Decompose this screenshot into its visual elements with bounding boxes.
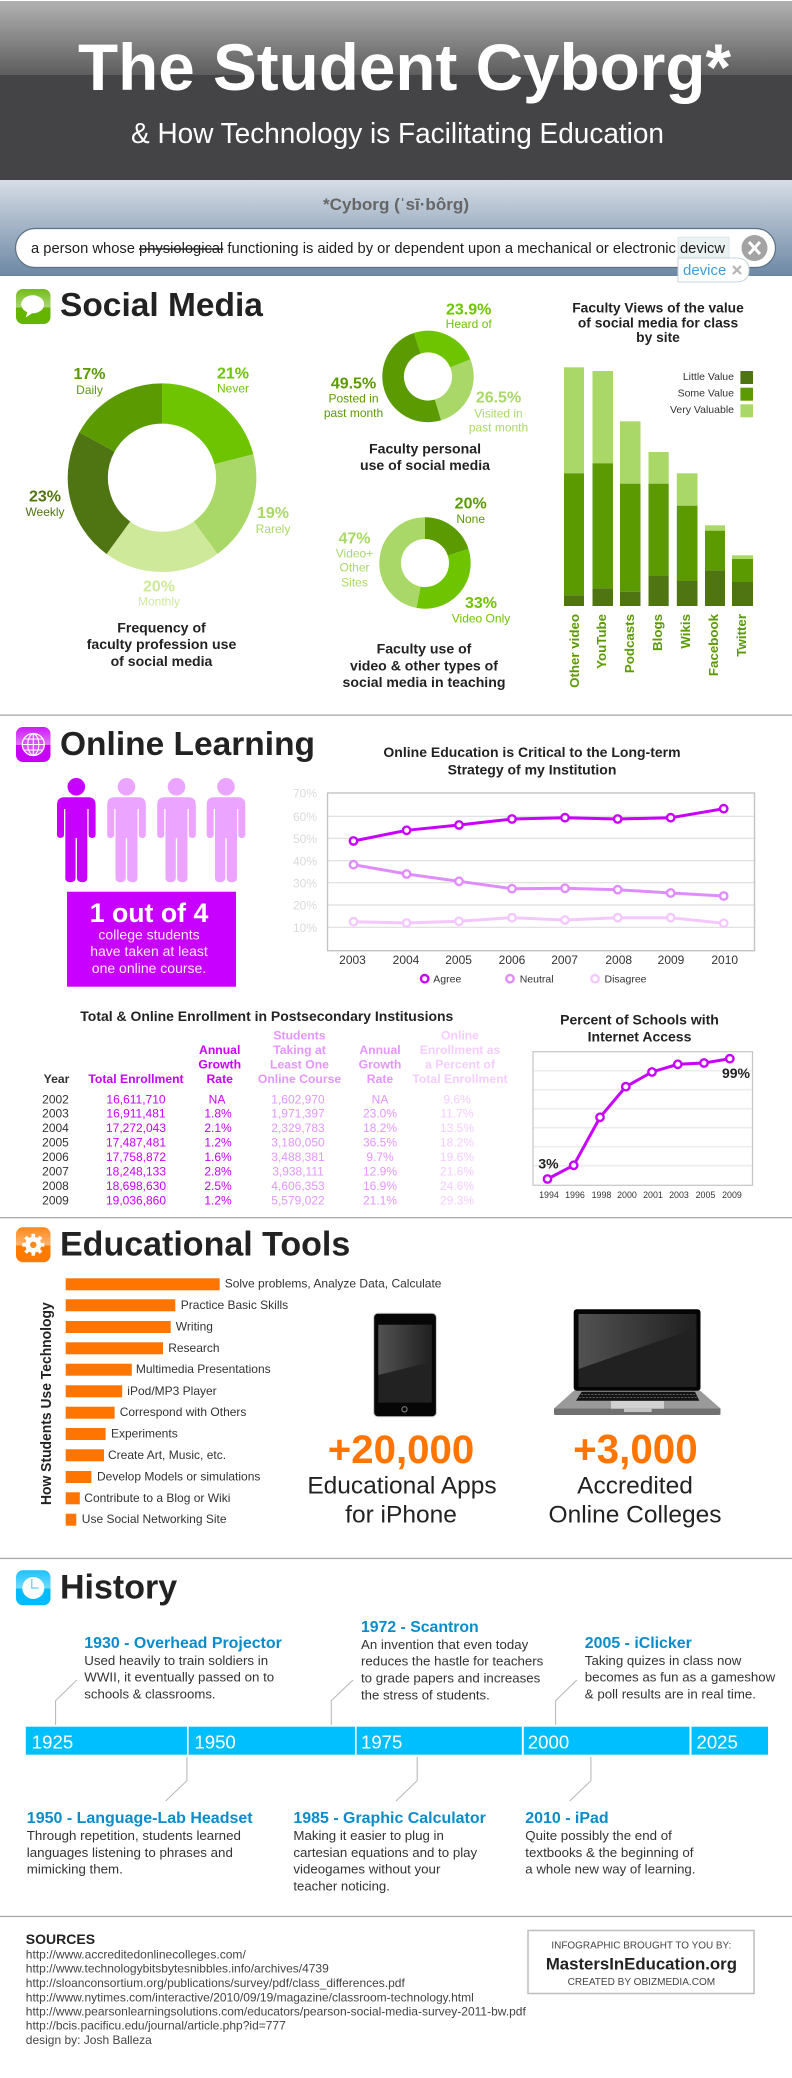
event: 1950 headset xyxy=(27,1810,253,1877)
series: neutral xyxy=(350,861,727,900)
column: online percent: 13.5% xyxy=(440,1121,474,1135)
section heading: Educational Tools: Educational Tools xyxy=(60,1226,350,1264)
donut chart: video use in teaching xyxy=(336,496,510,626)
donut chart: video use in teaching: 47% xyxy=(338,530,371,547)
legend: Neutral xyxy=(520,974,554,986)
column: online growth rate: 18.2% xyxy=(363,1121,397,1135)
donut chart: personal use: Visited in xyxy=(474,406,523,420)
column: online growth rate: NA xyxy=(372,1092,388,1106)
legend xyxy=(670,371,753,417)
donut chart: video use in teaching: Sites xyxy=(341,575,368,589)
line chart: schools with internet: 2009 xyxy=(722,1190,742,1200)
column: total enrollment: 19,036,860 xyxy=(106,1193,166,1207)
column: students online: 2,329,783 xyxy=(271,1121,325,1135)
bar chart: how students use technology: Contribute to a Blog or Wiki xyxy=(84,1491,230,1505)
column: total enrollment: 17,758,872 xyxy=(106,1150,166,1164)
line chart: online education critical: 2004 xyxy=(393,953,420,967)
stat: +3,000 colleges: +3,000 xyxy=(573,1426,698,1472)
donut chart: frequency of use: 19% xyxy=(257,505,289,522)
people pictogram: 1 of 4 xyxy=(57,778,245,882)
chart title: Internet Access xyxy=(588,1029,692,1045)
column: annual growth rate: 2.1% xyxy=(204,1121,232,1135)
definition heading: *Cyborg (ˈsī·bôrg) xyxy=(323,196,469,214)
donut chart: frequency of use: Rarely xyxy=(256,522,290,536)
column: online growth rate: 16.9% xyxy=(363,1179,397,1193)
icon: speech bubble xyxy=(16,289,50,324)
series: disagree xyxy=(350,914,727,927)
caption: video use: social media in teaching xyxy=(343,674,505,690)
event: 1930 overhead projector: schools & classrooms. xyxy=(84,1687,216,1702)
column: total enrollment: 17,487,481 xyxy=(106,1136,166,1150)
column: online percent: Online xyxy=(441,1029,479,1043)
line chart: online education critical: 30% xyxy=(293,876,317,890)
column: online growth rate: 23.0% xyxy=(363,1107,397,1121)
donut chart: personal use xyxy=(324,301,528,435)
stat: +3,000 colleges xyxy=(549,1426,721,1529)
bar labels: Blogs xyxy=(650,614,665,651)
event: 1930 overhead projector: WWII, it eventually passed on to xyxy=(84,1670,274,1685)
event: 1930 overhead projector: Used heavily to train soldiers in xyxy=(84,1653,268,1668)
column: students online: Taking at xyxy=(273,1043,326,1057)
donut chart: video use in teaching: Video Only xyxy=(452,612,510,626)
event: 1985 calculator: videogames without your xyxy=(293,1862,441,1877)
series: agree xyxy=(350,805,727,845)
bar labels: Wikis xyxy=(678,614,693,649)
timeline: 1950 xyxy=(194,1731,236,1752)
column: annual growth rate: Rate xyxy=(206,1072,233,1086)
credit box: MastersInEducation.org xyxy=(546,1954,737,1973)
donut chart: video use in teaching: 20% xyxy=(455,496,487,513)
event: 1930 overhead projector xyxy=(84,1635,282,1702)
column: total enrollment: Total Enrollment xyxy=(88,1072,184,1086)
donut chart: personal use: past month xyxy=(469,421,528,435)
event: 1985 calculator: Making it easier to plug in xyxy=(293,1828,444,1843)
bar chart: how students use technology: Practice Basic Skills xyxy=(181,1298,288,1312)
autocorrect tooltip: device xyxy=(683,262,726,279)
column: online growth rate: Growth xyxy=(359,1057,401,1071)
caption: video use: video & other types of xyxy=(350,657,498,673)
donut chart: personal use: past month xyxy=(324,406,383,420)
line chart: schools with internet: 2001 xyxy=(643,1190,663,1200)
donut chart: frequency of use: 23% xyxy=(29,488,61,506)
chart title: of social media for class xyxy=(578,315,738,330)
column: students online: Online Course xyxy=(258,1072,341,1086)
timeline xyxy=(26,1727,768,1755)
line chart: schools with internet: 1996 xyxy=(565,1190,585,1200)
event: 2005 iclicker: & poll results are in real time. xyxy=(585,1687,756,1702)
callout: 1 out of 4: have taken at least xyxy=(90,943,208,959)
event: 1972 scantron: 1972 - Scantron xyxy=(361,1619,479,1636)
bar chart: how students use technology: Experiments xyxy=(111,1426,178,1440)
donut chart: frequency of use: Daily xyxy=(76,383,103,397)
event: 2010 ipad xyxy=(525,1810,696,1877)
bar labels: Podcasts xyxy=(622,614,637,673)
donut chart: frequency of use: Weekly xyxy=(25,505,65,519)
line chart: schools with internet: 99% xyxy=(722,1065,751,1081)
sources: http://www.accreditedonlinecolleges.com/ xyxy=(26,1948,247,1961)
donut chart: frequency of use: 20% xyxy=(143,578,175,596)
chart title: Strategy of my Institution xyxy=(448,761,616,777)
column: students online: 3,938,111 xyxy=(272,1165,324,1179)
search bar: a person whose physiological functioning is aided by or dependent upon a mechanical or electronic devicw xyxy=(31,241,726,257)
event: 1985 calculator xyxy=(293,1810,486,1894)
bar chart: how students use technology: Research xyxy=(168,1341,220,1355)
bar labels xyxy=(567,613,749,688)
line chart: schools with internet: 1994 xyxy=(539,1190,559,1200)
donut chart: frequency of use: 21% xyxy=(217,366,249,382)
column: online percent: Enrollment as xyxy=(420,1043,501,1057)
donut chart: video use in teaching: Video+ xyxy=(336,546,373,560)
donut chart: frequency of use: Monthly xyxy=(138,594,180,608)
icon: globe xyxy=(16,727,50,762)
column: online percent: 9.6% xyxy=(443,1092,471,1106)
event: 2005 iclicker: Taking quizes in class now xyxy=(585,1653,742,1668)
definition band xyxy=(0,180,792,276)
column: students online: 4,606,353 xyxy=(271,1179,325,1193)
column: annual growth rate: 2.8% xyxy=(204,1165,232,1179)
line chart: online education critical: 2008 xyxy=(605,953,632,967)
icon: gear xyxy=(16,1227,50,1262)
column: year: 2006 xyxy=(42,1150,69,1164)
connector lines xyxy=(56,1680,591,1801)
line chart: online education critical: 2003 xyxy=(339,953,366,967)
line chart: online education critical: 50% xyxy=(293,832,317,846)
bar chart: how students use technology: iPod/MP3 Player xyxy=(127,1384,217,1398)
line chart: schools with internet: 1998 xyxy=(592,1190,611,1200)
subtitle: & How Technology is Facilitating Education xyxy=(131,118,664,150)
column: online growth rate: Rate xyxy=(367,1072,393,1086)
chart title: by site xyxy=(636,330,680,345)
sources: http://www.nytimes.com/interactive/2010/09/19/magazine/classroom-technology.html xyxy=(26,1991,474,2004)
legend: Little Value xyxy=(683,371,734,383)
autocorrect tooltip xyxy=(678,258,749,282)
column: year: 2004 xyxy=(42,1121,69,1135)
line chart: online education critical: 20% xyxy=(293,899,317,913)
stacked bar chart: faculty views xyxy=(564,301,753,688)
column: annual growth rate xyxy=(198,1043,241,1207)
stat: +20,000 apps: +20,000 xyxy=(328,1427,474,1472)
bar labels: Facebook xyxy=(706,613,721,676)
column: online growth rate: 36.5% xyxy=(363,1136,397,1150)
column: students online: 1,971,397 xyxy=(271,1107,325,1121)
donut chart: personal use: 26.5% xyxy=(476,390,521,407)
column: annual growth rate: 1.2% xyxy=(204,1136,232,1150)
column: online growth rate: 21.1% xyxy=(363,1193,397,1207)
caption: frequency: Frequency of xyxy=(117,620,206,636)
bar chart: how students use technology: Develop Models or simulations xyxy=(97,1470,260,1484)
line chart: schools with internet: 2000 xyxy=(617,1190,637,1200)
event: 1950 headset: Through repetition, students learned xyxy=(27,1828,241,1843)
column: online percent xyxy=(412,1029,508,1207)
line chart: online education critical: 2010 xyxy=(711,953,738,967)
stat: +3,000 colleges: Online Colleges xyxy=(549,1502,721,1529)
column: total enrollment: 17,272,043 xyxy=(106,1121,166,1135)
stat: +20,000 apps xyxy=(307,1427,497,1529)
column: students online: 3,488,381 xyxy=(271,1150,325,1164)
column: online percent: 24.6% xyxy=(440,1179,474,1193)
column: annual growth rate: 1.6% xyxy=(204,1150,232,1164)
section heading: Online Learning: Online Learning xyxy=(60,726,315,763)
bar chart: how students use technology: Create Art, Music, etc. xyxy=(108,1448,226,1462)
line chart: schools with internet xyxy=(533,1011,752,1200)
column: year: 2009 xyxy=(42,1193,69,1207)
column: total enrollment: 18,698,630 xyxy=(106,1179,166,1193)
column: online growth rate: Annual xyxy=(359,1043,401,1057)
event: 1985 calculator: 1985 - Graphic Calculator xyxy=(293,1810,486,1827)
column: total enrollment: 18,248,133 xyxy=(106,1165,166,1179)
bar chart: how students use technology: Writing xyxy=(176,1320,213,1334)
line chart: schools with internet: 2003 xyxy=(669,1190,689,1200)
column: annual growth rate: NA xyxy=(209,1092,225,1106)
event: 1972 scantron: the stress of students. xyxy=(361,1687,490,1702)
event: 2005 iclicker: 2005 - iClicker xyxy=(585,1635,692,1652)
donut chart: personal use: 49.5% xyxy=(331,376,376,393)
column: total enrollment xyxy=(88,1072,184,1207)
column: total enrollment: 16,611,710 xyxy=(106,1092,166,1106)
column: online growth rate: 12.9% xyxy=(363,1165,397,1179)
sources: http://bcis.pacificu.edu/journal/article.php?id=777 xyxy=(26,2020,286,2033)
donut chart: video use in teaching: 33% xyxy=(465,595,497,612)
donut chart: video use in teaching: Other xyxy=(339,561,370,575)
sources: http://sloanconsortium.org/publications/survey/pdf/class_differences.pdf xyxy=(26,1977,406,1990)
column: online growth rate xyxy=(359,1043,401,1207)
event: 2010 ipad: Quite possibly the end of xyxy=(525,1828,672,1843)
event: 1972 scantron xyxy=(361,1619,544,1702)
timeline: 1975 xyxy=(361,1731,402,1752)
callout: 1 out of 4: 1 out of 4 xyxy=(90,898,208,928)
credit box: INFOGRAPHIC BROUGHT TO YOU BY: xyxy=(551,1940,731,1952)
event: 2005 iclicker xyxy=(585,1635,776,1702)
icon: iPhone xyxy=(374,1313,436,1417)
legend: Disagree xyxy=(604,974,647,986)
bar chart: how students use technology: Multimedia Presentations xyxy=(136,1362,271,1376)
column: online percent: 19.6% xyxy=(440,1150,474,1164)
column: year: 2003 xyxy=(42,1107,69,1121)
callout: 1 out of 4: one online course. xyxy=(92,960,206,976)
donut chart: frequency of use: 17% xyxy=(73,366,106,383)
axis title: How Students Use Technology xyxy=(39,1302,55,1505)
sources xyxy=(26,1931,527,2047)
stat: +20,000 apps: Educational Apps xyxy=(307,1472,497,1499)
bar chart: how students use technology: Correspond with Others xyxy=(120,1405,246,1419)
event: 1972 scantron: reduces the hastle for teachers xyxy=(361,1654,544,1669)
event: 1972 scantron: to grade papers and increases xyxy=(361,1671,541,1686)
section heading: History: History xyxy=(60,1568,177,1606)
legend xyxy=(421,974,647,986)
donut chart: frequency of use xyxy=(25,366,290,608)
event: 1950 headset: 1950 - Language-Lab Headset xyxy=(27,1810,253,1827)
column: annual growth rate: 1.2% xyxy=(204,1193,232,1207)
timeline: 1925 xyxy=(32,1731,73,1752)
sources: http://www.pearsonlearningsolutions.com/educators/pearson-social-media-survey-2011-bw.pdf xyxy=(26,2006,527,2019)
donut chart: personal use: 23.9% xyxy=(446,301,491,318)
bar labels: YouTube xyxy=(594,614,609,669)
caption: frequency: of social media xyxy=(111,653,213,669)
line chart: schools with internet: 2005 xyxy=(696,1190,715,1200)
donut chart: video use in teaching: None xyxy=(456,512,485,526)
bar labels: Twitter xyxy=(734,614,749,657)
event: 1950 headset: mimicking them. xyxy=(27,1862,123,1877)
event: 1972 scantron: An invention that even today xyxy=(361,1637,529,1652)
legend: Very Valuable xyxy=(670,404,734,416)
header banner xyxy=(0,1,792,180)
line chart: online education critical: 70% xyxy=(293,787,317,801)
column: students online: 1,602,970 xyxy=(271,1092,325,1106)
line chart: online education critical: 60% xyxy=(293,810,317,824)
line chart: online education critical: 2006 xyxy=(499,953,526,967)
column: students online: Least One xyxy=(270,1057,329,1071)
column: online percent: a Percent of xyxy=(425,1057,496,1071)
column: online percent: 21.6% xyxy=(440,1165,474,1179)
icon: laptop xyxy=(554,1309,720,1415)
title: The Student Cyborg* xyxy=(78,30,731,104)
icon: clock xyxy=(16,1570,50,1605)
column: annual growth rate: Annual xyxy=(199,1043,240,1057)
stat: +20,000 apps: for iPhone xyxy=(345,1502,457,1529)
column: annual growth rate: 2.5% xyxy=(204,1179,232,1193)
event: 1930 overhead projector: 1930 - Overhead Projector xyxy=(84,1635,282,1652)
caption: personal use: use of social media xyxy=(360,457,490,473)
event: 1985 calculator: cartesian equations and to play xyxy=(293,1845,478,1860)
bar chart: how students use technology: Solve problems, Analyze Data, Calculate xyxy=(225,1277,442,1291)
donut chart: personal use: Posted in xyxy=(328,392,379,406)
donut chart: personal use: Heard of xyxy=(446,317,492,331)
column: year: 2002 xyxy=(42,1092,69,1106)
line chart: schools with internet: 3% xyxy=(538,1155,559,1171)
line chart: online education critical: 2007 xyxy=(551,953,578,967)
bar labels: Other video xyxy=(567,614,582,688)
column: year: 2005 xyxy=(42,1136,69,1150)
credit box: CREATED BY OBIZMEDIA.COM xyxy=(568,1976,715,1988)
column: online percent: 18.2% xyxy=(440,1136,474,1150)
donut chart: frequency of use: Never xyxy=(217,382,249,396)
column: online percent: Total Enrollment xyxy=(412,1072,508,1086)
bar chart: how students use technology xyxy=(39,1277,442,1526)
event: 2005 iclicker: becomes as fun as a gameshow xyxy=(585,1670,776,1685)
column: annual growth rate: Growth xyxy=(198,1057,241,1071)
table title: Total & Online Enrollment in Postsecondary Institusions xyxy=(80,1009,453,1024)
sources: design by: Josh Balleza xyxy=(26,2034,152,2047)
legend: Agree xyxy=(433,974,461,986)
callout: 1 out of 4 xyxy=(67,892,236,987)
column: students online: 3,180,050 xyxy=(271,1136,325,1150)
line chart: online education critical: 10% xyxy=(293,921,317,935)
column: total enrollment: 16,911,481 xyxy=(106,1107,166,1121)
column: year xyxy=(42,1072,70,1207)
stat: +3,000 colleges: Accredited xyxy=(577,1472,693,1499)
caption: personal use: Faculty personal xyxy=(369,440,481,456)
timeline: 2025 xyxy=(696,1731,738,1752)
caption: frequency: faculty profession use xyxy=(87,636,236,652)
table: enrollment xyxy=(42,1009,508,1207)
column: year: 2008 xyxy=(42,1179,69,1193)
column: annual growth rate: 1.8% xyxy=(204,1107,232,1121)
column: year: 2007 xyxy=(42,1165,69,1179)
sources: SOURCES xyxy=(26,1931,95,1947)
legend: Some Value xyxy=(678,388,734,400)
chart title: Faculty Views of the value xyxy=(572,301,744,316)
search bar xyxy=(16,228,776,268)
callout: 1 out of 4: college students xyxy=(98,926,200,942)
event: 1985 calculator: teacher noticing. xyxy=(293,1879,390,1894)
column: students online: 5,579,022 xyxy=(271,1193,325,1207)
caption: video use: Faculty use of xyxy=(377,641,471,657)
timeline: 2000 xyxy=(528,1731,569,1752)
chart title: Online Education is Critical to the Long-term xyxy=(383,744,681,760)
bar chart: how students use technology: Use Social Networking Site xyxy=(82,1512,227,1526)
event: 2010 ipad: textbooks & the beginning of xyxy=(525,1845,694,1860)
event: 2010 ipad: 2010 - iPad xyxy=(525,1810,609,1827)
line chart: online education critical: 2005 xyxy=(445,953,472,967)
column: students online: Students xyxy=(273,1029,326,1043)
column: online percent: 29.3% xyxy=(440,1193,474,1207)
section heading: Social Media: Social Media xyxy=(60,287,263,324)
column: online growth rate: 9.7% xyxy=(366,1150,394,1164)
column: online percent: 11.7% xyxy=(440,1107,474,1121)
column: students online xyxy=(258,1029,341,1207)
event: 1950 headset: languages listening to phrases and xyxy=(27,1845,233,1860)
line chart: online education critical xyxy=(293,744,754,986)
credit box xyxy=(528,1930,754,1994)
event: 2010 ipad: a whole new way of learning. xyxy=(525,1862,696,1877)
line chart: online education critical: 40% xyxy=(293,854,317,868)
line chart: online education critical: 2009 xyxy=(658,953,685,967)
chart title: Percent of Schools with xyxy=(560,1011,719,1027)
sources: http://www.technologybitsbytesnibbles.info/archives/4739 xyxy=(26,1963,329,1976)
column: year: Year xyxy=(44,1072,70,1086)
